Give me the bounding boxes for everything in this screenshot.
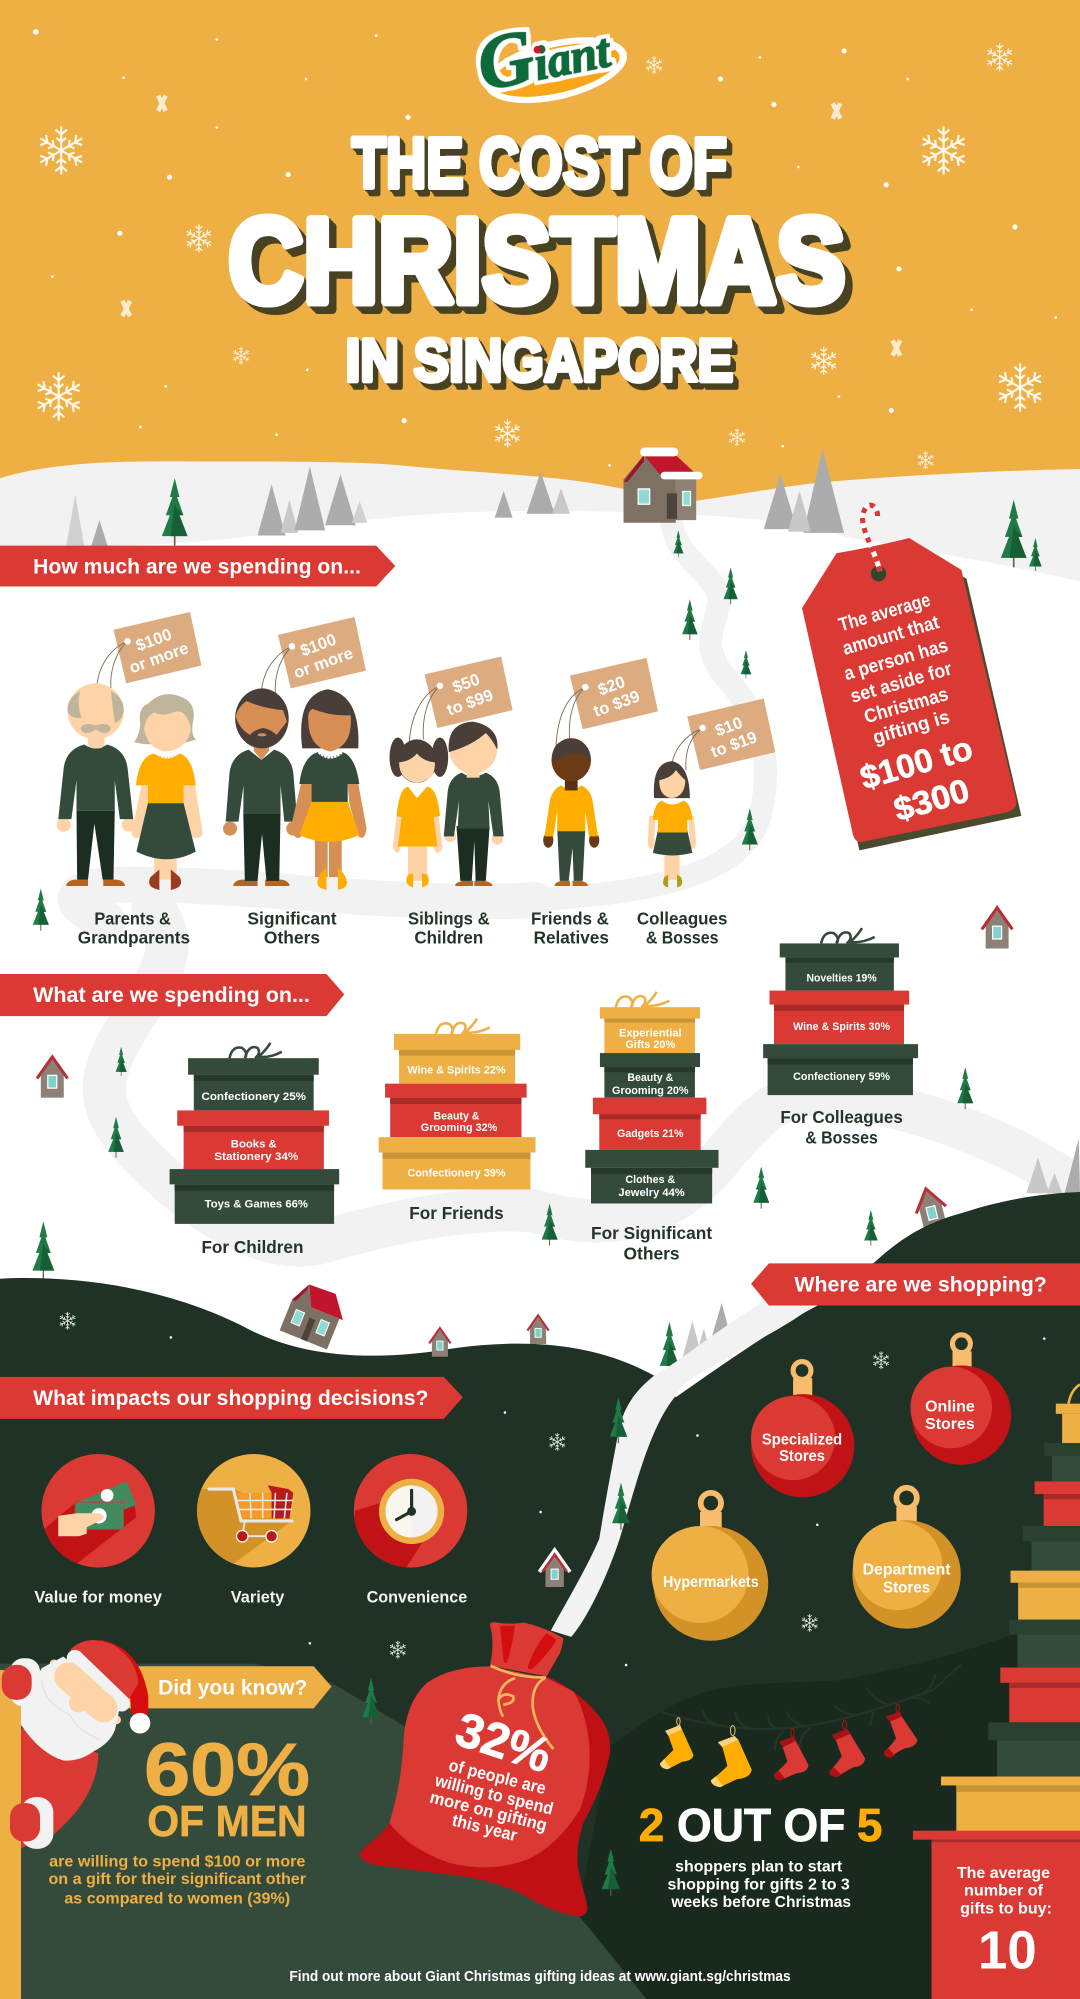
stat: 60% of men: on a gift for their significant other [48,1871,306,1888]
main house [624,447,703,523]
banner: what impacts: What impacts our shopping decisions? [33,1385,428,1410]
gift stack: for significant others: Experiential [619,1027,682,1039]
tag text: a person has [842,635,951,685]
banner: how much: How much are we spending on... [33,554,361,579]
gift stack: for significant others: Clothes & [625,1174,675,1186]
snow hill [0,461,1080,581]
gift stack: for colleagues: Novelties 19% [806,973,877,985]
dark hills [0,1192,1080,1999]
footer: Find out more about Giant Christmas gifting ideas at www.giant.sg/christmas [289,1969,791,1985]
gift stack: for friends [379,1019,536,1223]
background sky [0,0,1080,586]
price tag: colleagues: $10 [713,713,745,740]
gift stack: for friends: Beauty & [434,1110,480,1122]
gift stack: for friends: Grooming 32% [421,1122,498,1134]
label: for significant others: For Significant [591,1223,712,1243]
night snow [59,1312,1046,1666]
gift stack: for significant others: Beauty & [627,1072,673,1084]
icon: convenience [351,1454,467,1607]
title line 1: THE COST OF [352,123,727,203]
tag text: amount that [840,612,942,660]
stat: 2 out of 5 [639,1799,882,1911]
price tag: parents: $100 [133,625,174,655]
gift stack: for significant others: Gadgets 21% [617,1128,684,1140]
gift stack: for children: Confectionery 25% [201,1091,306,1103]
banner: where are we shopping [751,1263,1080,1305]
tag text: The average [836,590,933,636]
person: grandfather [57,683,136,886]
garland [660,1665,960,1750]
person: man [223,688,300,886]
trees [32,478,1042,1373]
gift stack: for children: Books & [231,1138,277,1150]
price tag: significant others [261,617,366,694]
price tag: colleagues: to $19 [708,727,760,762]
small houses [37,908,1012,1232]
ornament: department stores: Department [863,1561,951,1578]
sack neck [490,1622,563,1676]
price tag: significant others: $100 [298,630,339,660]
label: for children: For Children [201,1237,303,1257]
stat: number of gifts: The average [957,1865,1050,1882]
banner: how much [0,546,395,586]
snow dots [33,29,1057,467]
gift stack: for colleagues: Wine & Spirits 30% [793,1021,890,1033]
price tag: siblings: to $99 [444,685,496,719]
label: parents: Parents & [94,908,171,928]
person: woman [292,689,367,890]
stat: 60% of men: are willing to spend $100 or more [49,1853,306,1870]
stat: 2 out of 5: weeks before Christmas [670,1894,851,1911]
stat: number of gifts: 10 [978,1921,1037,1980]
title line 3: IN SINGAPORE [346,327,733,394]
sock: yellow 1 [660,1718,693,1769]
ornament: online stores [910,1335,1011,1465]
sack: this year [450,1810,520,1845]
label: for friends: For Friends [409,1203,504,1223]
tag hole [871,566,886,581]
label: bosses: & Bosses [646,927,719,947]
darker lower ground [561,1634,1080,1999]
sack shadow body [360,1676,610,1916]
lower trees [362,1397,630,1896]
price tag: friends [556,658,658,752]
sock: red 2 [829,1720,865,1777]
person: girl [390,738,448,887]
garland and stockings [660,1665,960,1787]
32%: 32% [449,1702,558,1783]
banner: did you know: Did you know? [158,1674,307,1699]
title line 2: CHRISTMAS [228,195,845,328]
stat: 60% of men [48,1728,310,1907]
person: boy [444,722,504,886]
stat: 2 out of 5: shoppers plan to start [675,1859,843,1876]
tag text: gifting is [871,707,952,749]
big price tag [802,505,1021,850]
ornament: specialized stores: Specialized [762,1431,842,1448]
people labels [78,908,727,947]
tag text [836,590,977,829]
price tag: siblings: $50 [450,670,482,697]
banner: where are we shopping: Where are we shopping? [794,1271,1047,1296]
stat: 2 out of 5: OUT OF [677,1799,845,1851]
right gift stack [913,1385,1080,1999]
price tag: siblings [409,657,513,742]
banner: did you know [128,1666,332,1708]
sack ribbon [491,1666,553,1749]
road over dark hill [551,1300,820,1637]
price tag: friends: $20 [595,672,628,699]
stat: 2 out of 5: 2 [639,1799,664,1851]
gift stack: for children [170,1043,339,1257]
sock: yellow 2 [711,1726,752,1787]
stat: 60% of men: 60% [144,1728,310,1811]
gift stack: for friends: Confectionery 39% [407,1168,506,1180]
gift stack: for children: Stationery 34% [214,1151,299,1163]
tag text: set aside for [848,659,955,708]
tag text: $100 to [856,730,977,797]
label: others line: Others [624,1244,680,1264]
label: siblings: Siblings & [408,908,490,928]
gift stack: for friends: Wine & Spirits 22% [407,1064,506,1076]
label: convenience: Convenience [367,1588,467,1607]
label: others: Others [264,927,320,947]
tag body [802,538,1016,842]
ornament: online stores: Online [925,1398,975,1415]
gift stack: for colleagues: Confectionery 59% [793,1071,890,1083]
stat: number of gifts: number of [964,1883,1044,1900]
ornament: specialized stores: Stores [779,1448,825,1465]
gift stack: for significant others: Grooming 20% [612,1085,689,1097]
sack: willing to spend [432,1770,555,1819]
ornament: online stores: Stores [925,1416,975,1433]
yellow edge strip [0,1670,21,1999]
tag text: Christmas [862,684,951,728]
label: for colleagues: For Colleagues [780,1107,903,1127]
ornament: department stores: Stores [883,1579,930,1596]
tag shadow [807,547,1021,850]
person: friend [543,738,599,886]
sack: of people are [447,1755,548,1798]
stat: 60% of men: OF MEN [147,1798,307,1846]
white ground [0,504,1080,1396]
santa [2,1640,150,1849]
ornament: hypermarkets: Hypermarkets [663,1574,759,1591]
sock: red 1 [774,1729,808,1781]
ornament: hypermarkets [652,1493,768,1641]
label: bosses line: & Bosses [805,1128,878,1148]
ornament: department stores [852,1488,961,1629]
person: colleague [648,761,696,887]
icon: value for money [34,1454,163,1607]
sock: red 3 [884,1704,917,1758]
label: friends: Friends & [531,908,609,928]
lower houses [280,1280,570,1587]
sack front [389,1666,590,1867]
stat: number of gifts [957,1865,1052,1980]
stat: 2 out of 5: shopping for gifts 2 to 3 [668,1876,850,1893]
banner: what are we spending on [0,974,344,1016]
title [228,123,845,394]
gift stack: for significant others: Gifts 20% [625,1039,675,1051]
price tag: colleagues [672,699,775,770]
price tag: friends: to $39 [591,687,642,721]
label: value for money: Value for money [34,1588,163,1607]
tag text: $300 [890,772,974,829]
sack [360,1622,610,1916]
stat: 2 out of 5: 5 [857,1799,882,1851]
stat: number of gifts: gifts to buy: [960,1901,1052,1918]
banner: what are we spending on: What are we spending on... [33,982,310,1007]
price tag: significant others: or more [291,643,355,682]
candy string [863,505,880,571]
banner: what impacts [0,1377,463,1419]
gift stack: for colleagues [763,928,918,1148]
winding road [76,525,1065,1245]
ornament: specialized stores [751,1362,854,1497]
stat: 60% of men: as compared to women (39%) [64,1890,290,1907]
label: grandparents: Grandparents [78,927,190,947]
person: grandmother [131,694,203,890]
gift stack: for children: Toys & Games 66% [205,1198,308,1210]
snowflakes [35,43,1044,469]
Giant logo: Giant [470,0,617,107]
label: significant: Significant [247,908,337,928]
price tag: parents [97,612,201,688]
gift stack: for significant others: Jewelry 44% [618,1187,685,1199]
price tag: parents: or more [127,638,191,677]
sack: more on gifting [428,1787,549,1835]
mountains [66,449,1080,1364]
gift stack: for significant others [585,992,719,1264]
label: children: Children [414,927,483,947]
sack folds [500,1626,557,1669]
medium green hill [0,1664,646,1999]
label: variety: Variety [231,1588,285,1607]
icon: variety [191,1454,310,1607]
label: colleagues: Colleagues [637,908,727,928]
label: relatives: Relatives [534,927,609,947]
